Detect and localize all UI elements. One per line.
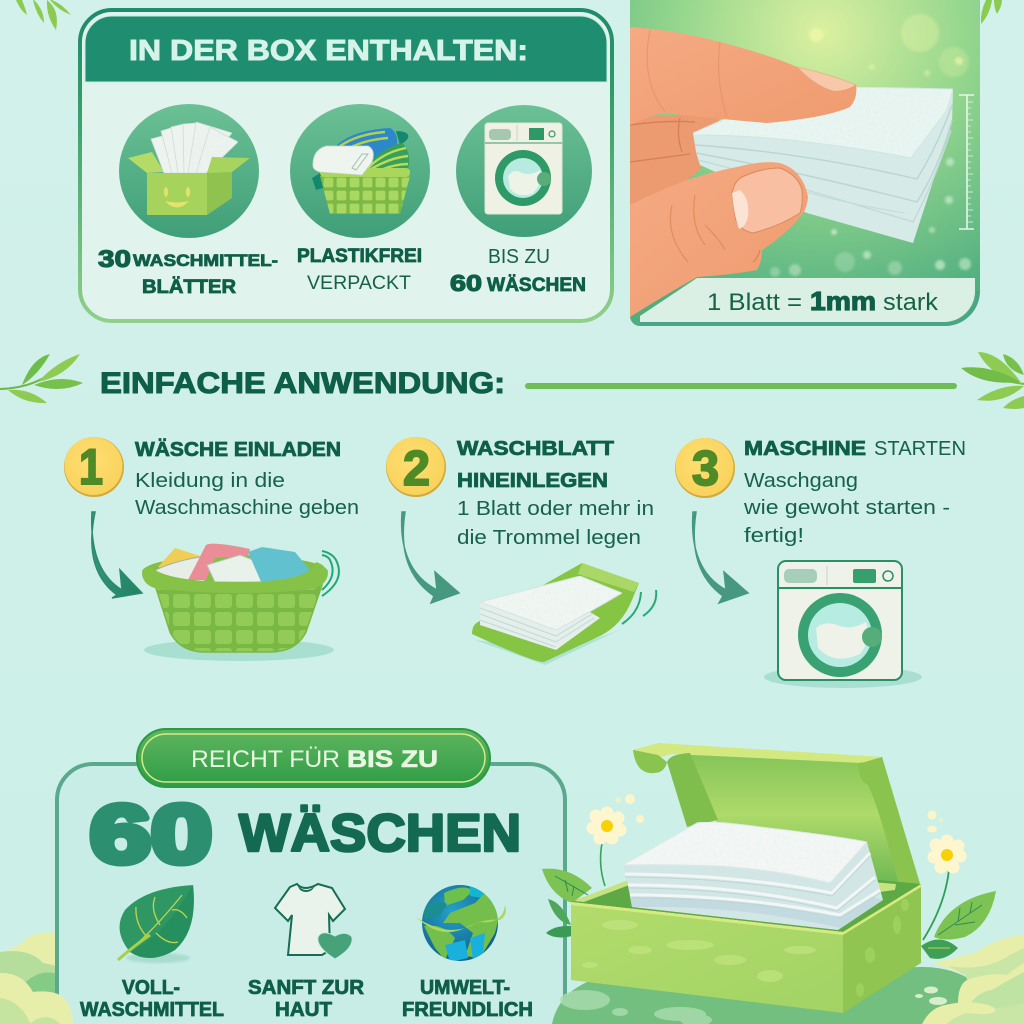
label: plastikfrei verpackt: PLASTIKFREI <box>297 246 422 267</box>
number badge 3: 3 <box>692 442 719 496</box>
label: bis zu 60 Wäschen: 60 <box>450 270 482 296</box>
index finger <box>630 27 856 125</box>
decoration: left branch <box>0 354 83 403</box>
label: 30 Waschmittel-Blätter <box>98 246 278 298</box>
step 2 text: 1 Blatt oder mehr in <box>457 498 654 520</box>
ruler <box>959 95 974 229</box>
label: 30 Waschmittel-Blätter: WASCHMITTEL- <box>133 251 278 270</box>
step 3 title: STARTEN <box>874 438 966 460</box>
number badge 2: 2 <box>403 442 430 496</box>
number badge 1: 1 <box>79 439 103 495</box>
decoration: right branch <box>961 352 1024 409</box>
step 3 text: wie gewoht starten - <box>743 497 950 519</box>
decoration: bottom-right clouds <box>922 935 1024 1024</box>
panel frame <box>57 764 565 1024</box>
top sheet <box>623 822 867 883</box>
number badge 1 <box>64 437 124 497</box>
step 3 title <box>744 438 966 460</box>
ground hill <box>552 967 990 1024</box>
big word Wäschen: WÄSCHEN <box>239 804 521 863</box>
caption bar <box>640 278 975 322</box>
arrow 3 <box>693 512 748 603</box>
caption text: stark <box>883 289 939 316</box>
label: bis zu 60 Wäschen <box>450 246 586 296</box>
arrow 2 <box>402 512 459 603</box>
icon: box with sheets <box>119 104 259 238</box>
illustration: washing machine <box>764 561 922 688</box>
banner: reicht für bis zu <box>137 729 490 787</box>
icon: washing machine small <box>456 105 592 237</box>
caption text: 1 Blatt = <box>707 289 802 316</box>
decoration: bottom-left front clouds <box>0 973 73 1024</box>
icon: laundry basket with towels <box>290 104 430 238</box>
step 3 title: MASCHINE <box>744 438 866 460</box>
step 3 <box>675 438 966 688</box>
photo background <box>630 0 980 326</box>
panel: 60 Wäschen <box>57 729 565 1024</box>
label: plastikfrei verpackt: VERPACKT <box>307 272 411 294</box>
illustration: open product box with sheets <box>571 743 921 1013</box>
step 2 <box>386 437 656 665</box>
thumb creases <box>670 195 725 262</box>
label: umweltfreundlich <box>402 977 533 1021</box>
label: umweltfreundlich: FREUNDLICH <box>402 999 533 1021</box>
step 2 title <box>457 438 614 492</box>
label: 30 Waschmittel-Blätter: BLÄTTER <box>142 277 236 298</box>
box lid <box>633 743 920 890</box>
label: sanft zur Haut: SANFT ZUR <box>248 977 365 999</box>
heading: einfache Anwendung: EINFACHE ANWENDUNG: <box>100 367 505 400</box>
fingernail <box>797 67 856 91</box>
big number 60: 60 <box>90 789 212 880</box>
panel frame <box>80 10 612 321</box>
label: bis zu 60 Wäschen: BIS ZU <box>488 246 550 268</box>
label: sanft zur Haut: HAUT <box>275 999 332 1021</box>
panel: photo of hand holding sheets <box>630 0 980 326</box>
label: Vollwaschmittel <box>80 977 224 1021</box>
thumbnail <box>732 168 802 233</box>
stack of sheets <box>693 89 953 243</box>
label: plastikfrei verpackt <box>297 246 422 294</box>
divider line <box>525 383 957 389</box>
step 3 text: fertig! <box>744 525 804 547</box>
decoration: bottom-left back clouds <box>0 932 60 1000</box>
label: sanft zur Haut <box>248 977 365 1021</box>
step 1 <box>64 437 359 661</box>
top sheet <box>693 87 953 158</box>
label: Vollwaschmittel: VOLL- <box>122 977 180 999</box>
step 1 text: Waschmaschine geben <box>135 497 359 519</box>
step 3 text <box>743 470 950 547</box>
back fingers <box>630 114 720 205</box>
illustration: flower right with leaves <box>921 810 996 959</box>
step 1 text <box>135 470 359 519</box>
arrow 1 <box>92 512 142 598</box>
step 2 title: WASCHBLATT <box>457 438 614 460</box>
step 2 title: HINEINLEGEN <box>457 470 608 492</box>
icon: leaf <box>118 885 194 963</box>
number badge 2 <box>386 437 446 497</box>
step 3 text: Waschgang <box>744 470 858 492</box>
step 2 text: die Trommel legen <box>457 527 641 549</box>
banner: reicht für bis zu: BIS ZU <box>347 746 438 773</box>
step 1 text: Kleidung in die <box>135 470 285 492</box>
icon: T-shirt with heart <box>275 884 352 959</box>
number badge 3 <box>675 438 735 498</box>
thumb and lower hand <box>630 162 808 317</box>
decoration: top-left leaves <box>16 0 71 30</box>
banner: reicht für bis zu: REICHT FÜR <box>191 746 340 773</box>
illustration: laundry basket <box>142 544 339 661</box>
step 1 title: WÄSCHE EINLADEN <box>135 438 341 461</box>
box side <box>843 884 921 1013</box>
label: bis zu 60 Wäschen: WÄSCHEN <box>487 275 586 296</box>
decoration: top-right leaves <box>981 0 1002 24</box>
icon: globe <box>416 885 506 962</box>
illustration: flower left with leaves <box>542 794 644 937</box>
step 2 text <box>457 498 654 549</box>
caption text: 1mm <box>810 286 876 316</box>
label: 30 Waschmittel-Blätter: 30 <box>98 246 131 273</box>
panel: in der Box enthalten <box>80 10 612 321</box>
box inner back <box>571 880 921 932</box>
sheet stack <box>623 842 883 930</box>
box front <box>571 902 843 1013</box>
header band <box>85 16 607 82</box>
label: Vollwaschmittel: WASCHMITTEL <box>80 999 224 1021</box>
heading: IN DER BOX ENTHALTEN: <box>129 35 528 67</box>
caption text <box>707 286 939 316</box>
label: umweltfreundlich: UMWELT- <box>420 977 510 999</box>
illustration: sheet tray <box>472 563 656 665</box>
